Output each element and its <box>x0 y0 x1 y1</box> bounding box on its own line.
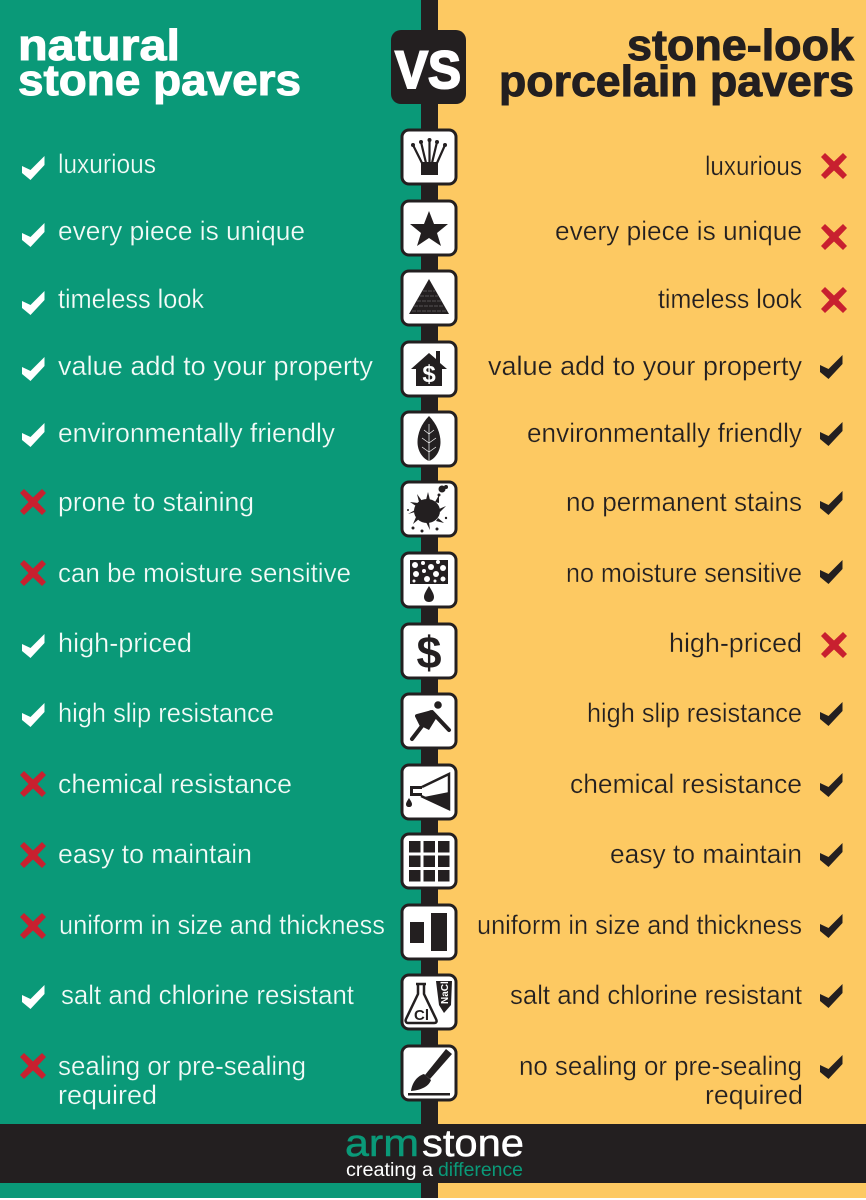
row: no sealing yes: required <box>705 1080 803 1110</box>
row: no permanent stains yes: no permanent stains <box>566 487 802 517</box>
logo: armstone: difference <box>438 1160 523 1181</box>
left column: natural stone attributes <box>20 149 385 1110</box>
row: moisture sensitive no: can be moisture sensitive <box>58 558 351 588</box>
icon: tile grid <box>402 834 456 888</box>
VS badge: VS <box>395 41 461 100</box>
row: every piece is unique yes: every piece is unique <box>58 216 305 246</box>
right column: porcelain attributes <box>477 151 847 1110</box>
footer band <box>0 1124 866 1183</box>
icon: dollar <box>402 624 456 678</box>
row: no sealing yes <box>519 1051 842 1110</box>
row: easy to maintain no: easy to maintain <box>58 839 252 869</box>
heading: stone-look porcelain pavers <box>499 21 855 106</box>
row: easy to maintain yes: easy to maintain <box>610 839 802 869</box>
row: luxurious no: luxurious <box>705 151 802 181</box>
row: salt and chlorine resistant yes: salt and chlorine resistant <box>61 980 354 1010</box>
icon: porous stone with water drop <box>402 553 456 607</box>
row: luxurious yes: luxurious <box>58 149 156 179</box>
icon: star <box>402 201 456 255</box>
row: no moisture sensitive yes: no moisture sensitive <box>566 558 802 588</box>
icon: house with dollar: $ <box>422 361 436 388</box>
row: high slip resistance yes: high slip resistance <box>58 698 274 728</box>
icon: tipping flask <box>402 765 456 819</box>
icon: paint brush <box>402 1046 456 1100</box>
icon: two size blocks <box>402 905 456 959</box>
heading: stone-look porcelain pavers: stone-look <box>627 21 855 70</box>
logo: armstone: creating a <box>346 1160 433 1181</box>
row: high-priced yes: high-priced <box>58 628 192 658</box>
row: timeless look no: timeless look <box>658 284 802 314</box>
heading: natural stone pavers: natural <box>18 21 180 70</box>
icon: house with dollar <box>402 342 456 396</box>
panel: natural stone background <box>0 0 421 1198</box>
logo: armstone: arm <box>345 1123 419 1165</box>
row: environmentally friendly yes: environmentally friendly <box>58 418 335 448</box>
row: timeless look yes: timeless look <box>58 284 204 314</box>
logo: armstone <box>345 1123 524 1181</box>
icon: slipping figure <box>402 694 456 748</box>
row: sealing required no <box>20 1051 306 1110</box>
row: luxurious yes <box>22 149 156 180</box>
row: chemical resistance yes: chemical resistance <box>570 769 802 799</box>
row: value add yes: value add to your property <box>488 351 802 381</box>
logo: armstone: stone <box>422 1123 524 1165</box>
icon: stain splat <box>402 482 456 536</box>
heading: natural stone pavers <box>18 21 301 105</box>
icon: chlorine flask and salt tube: NaCl <box>440 981 451 1004</box>
row: environmentally friendly yes: environmentally friendly <box>527 418 802 448</box>
heading: stone-look porcelain pavers: porcelain pavers <box>499 57 854 106</box>
center divider <box>421 0 438 1198</box>
row: uniform no: uniform in size and thickness <box>59 910 385 940</box>
row: chemical resistance no: chemical resistance <box>58 769 292 799</box>
row: high-priced no: high-priced <box>669 628 802 658</box>
panel: porcelain background <box>438 0 866 1198</box>
row: sealing required no: required <box>58 1080 157 1110</box>
icon: crown <box>402 130 456 184</box>
icon: chlorine flask and salt tube <box>402 975 456 1029</box>
row: no sealing yes: no sealing or pre-sealing <box>519 1051 802 1081</box>
row: value add yes: value add to your property <box>58 351 373 381</box>
row: uniform yes: uniform in size and thickness <box>477 910 802 940</box>
heading: natural stone pavers: stone pavers <box>18 56 301 105</box>
row: sealing required no: sealing or pre-sealing <box>58 1051 306 1081</box>
row: high slip resistance yes: high slip resistance <box>587 698 802 728</box>
row: salt and chlorine resistant yes: salt and chlorine resistant <box>510 980 802 1010</box>
row: prone to staining no: prone to staining <box>58 487 254 517</box>
icon: leaf <box>402 412 456 466</box>
icon: brick pyramid <box>402 271 456 325</box>
row: every piece is unique no: every piece is unique <box>555 216 802 246</box>
icon: dollar: $ <box>416 627 442 678</box>
icon: chlorine flask and salt tube: Cl <box>414 1007 429 1024</box>
